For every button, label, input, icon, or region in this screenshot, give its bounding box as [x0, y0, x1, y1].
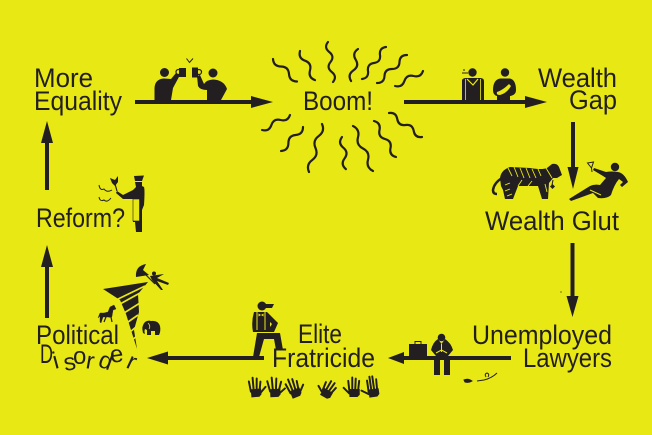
label: Elite Fratricide [272, 319, 375, 373]
icon: unemployed lawyer with briefcase [409, 334, 453, 375]
label: Political Disorder: r [122, 348, 141, 376]
label: Wealth Glut: Wealth Glut [485, 206, 619, 236]
icon: elephant [142, 321, 160, 335]
label: Political Disorder: s [61, 348, 78, 377]
label: Elite Fratricide: Elite [298, 319, 342, 349]
label: Unemployed Lawyers: Unemployed [472, 320, 612, 350]
icon: horse [98, 305, 116, 323]
arrow: wealth gap to glut [568, 122, 578, 189]
icon: figure with feather duster [99, 176, 144, 232]
icon: striped pennant with umbrella figure [103, 264, 169, 349]
label: Political Disorder: d [95, 346, 117, 376]
label: Political Disorder: e [108, 340, 125, 369]
icon: two people toasting [154, 58, 227, 100]
arrow: glut to lawyers [560, 243, 578, 317]
arrow: fratricide to disorder [147, 352, 264, 364]
arrow: reform to more equality [41, 121, 53, 190]
icon: row of raised hands [249, 375, 380, 400]
icon: reclining woman with martini [569, 162, 628, 201]
arrow: lawyers to fratricide [388, 352, 511, 364]
arrow: boom to wealth gap [404, 96, 547, 108]
icon: tiger with necklace [493, 164, 562, 199]
icon: elite figure stepping [252, 302, 283, 357]
label: Wealth Gap: Gap [569, 85, 617, 115]
label: Wealth Gap [538, 63, 617, 115]
arrow: equality to boom [135, 96, 273, 108]
burst: squiggles around boom [262, 42, 423, 172]
label: Wealth Gap: Wealth [538, 63, 617, 93]
label: Boom!: Boom! [303, 86, 373, 116]
label: More Equality: Equality [34, 86, 122, 116]
label: Political Disorder: r [84, 347, 97, 375]
label: Reform?: Reform? [36, 203, 125, 233]
label: More Equality: More [34, 63, 93, 93]
label: Unemployed Lawyers [472, 320, 612, 373]
icon: rich woman and person with baby [462, 68, 516, 100]
label: Unemployed Lawyers: Lawyers [523, 343, 612, 373]
label: Elite Fratricide: Fratricide [272, 343, 375, 373]
arrow: disorder to reform [41, 245, 53, 318]
label: More Equality [34, 63, 122, 116]
label: Political Disorder: o [73, 343, 86, 370]
label: Political Disorder: D [40, 339, 53, 369]
label: Political Disorder: i [50, 347, 62, 375]
label: Political Disorder [36, 320, 141, 377]
icon: small mouse and tail [464, 373, 497, 382]
label: Political Disorder: Political [36, 320, 119, 350]
